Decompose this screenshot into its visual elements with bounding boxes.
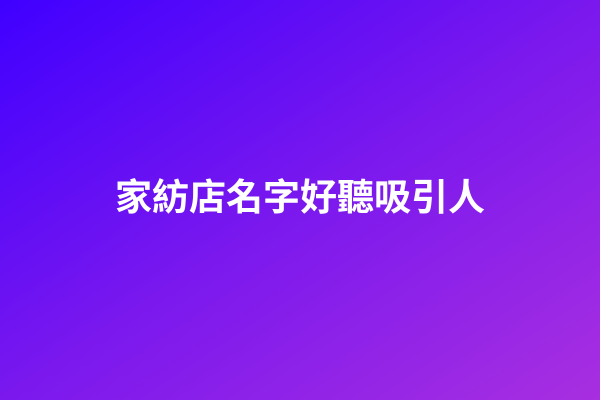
title: 家紡店名字好聽吸引人: [115, 177, 485, 218]
